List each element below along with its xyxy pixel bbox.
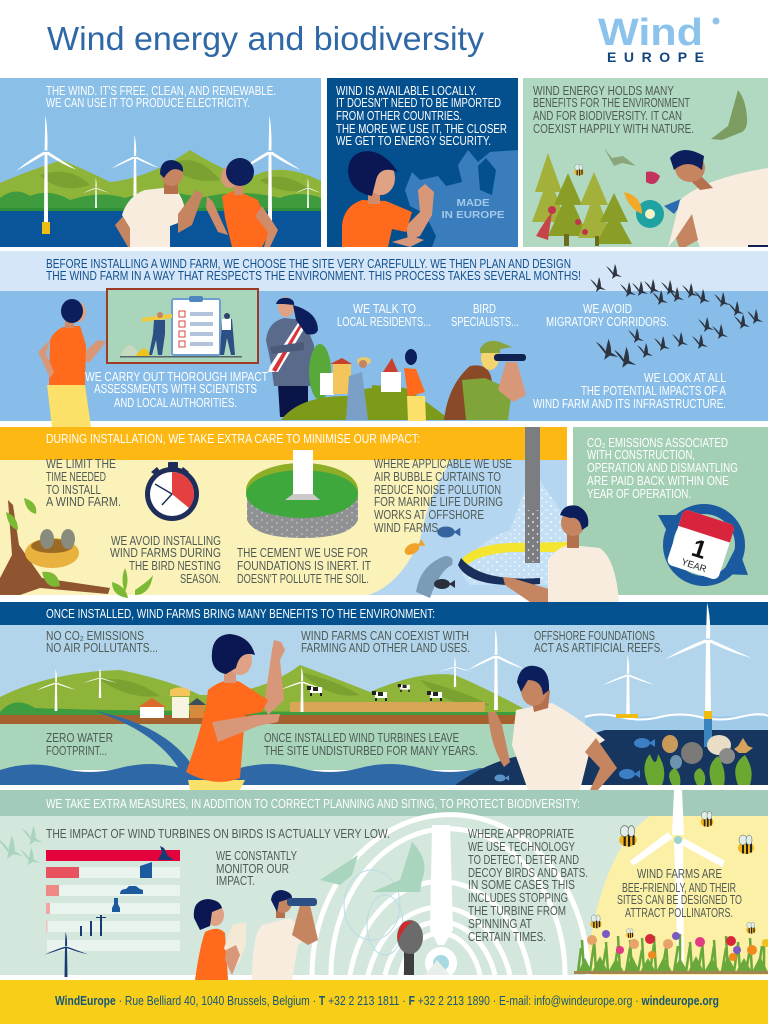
text: nesting: WIND FARMS DURING <box>110 545 221 560</box>
reef: shells and seaweed <box>494 735 753 785</box>
text: cement: DOESN'T POLLUTE THE SOIL. <box>237 571 369 586</box>
text: local energy: WE GET TO ENERGY SECURITY. <box>336 133 491 148</box>
text: nesting <box>110 533 221 586</box>
flock of migratory birds <box>590 264 763 368</box>
text: detect and deter: WHERE APPROPRIATE <box>468 826 574 841</box>
text: zero water: ZERO WATER <box>46 730 113 745</box>
heading: during installation: DURING INSTALLATION, WE TAKE EXTRA CARE TO MINIMISE OUR IMPACT: <box>46 431 420 446</box>
lower ground and water <box>0 711 768 790</box>
text: monitor: MONITOR OUR <box>216 861 289 876</box>
text: monitor: WE CONSTANTLY <box>216 848 297 863</box>
sea background <box>368 460 567 595</box>
cows <box>307 684 442 701</box>
panel: available locally <box>327 78 518 247</box>
person: man leaning <box>668 150 768 251</box>
text: air bubble curtains: WHERE APPLICABLE WE USE <box>374 456 512 471</box>
text: undisturbed: ONCE INSTALLED WIND TURBINES LEAVE <box>264 730 459 745</box>
text: air bubble curtains <box>374 456 512 535</box>
sky <box>0 625 768 725</box>
heading: extra measures: WE TAKE EXTRA MEASURES, IN ADDITION TO CORRECT PLANNING AND SITING, TO PROTECT BIODIVERSITY: <box>46 796 580 811</box>
text: monitor: IMPACT. <box>216 873 255 888</box>
icon: bat and eagle <box>320 842 424 892</box>
radar device <box>397 920 423 975</box>
person: woman waving <box>186 634 285 790</box>
text: time: WE LIMIT THE <box>46 456 116 471</box>
cement foundation <box>246 450 358 538</box>
text: undisturbed <box>264 730 478 758</box>
text: CO2 emissions <box>587 435 738 501</box>
text: potential impacts: WE LOOK AT ALL <box>644 370 726 385</box>
wind turbines <box>36 602 752 747</box>
hills and land <box>0 665 530 724</box>
text: CO2 emissions: ARE PAID BACK WITHIN ONE <box>587 473 729 488</box>
text: air bubble curtains: AIR BUBBLE CURTAINS TO <box>374 469 501 484</box>
text: residents, specialists, corridors: LOCAL RESIDENTS... <box>337 314 431 329</box>
heading: before installing: THE WIND FARM IN A WAY THAT RESPECTS THE ENVIRONMENT. THIS PROCESS TAKES SEVERAL MONTHS! <box>46 268 581 283</box>
map of Europe <box>405 150 518 247</box>
logo: WindEurope: Wind <box>598 12 703 54</box>
icon: pale birds <box>0 826 42 865</box>
text: impact assessments: AND LOCAL AUTHORITIES. <box>114 395 237 410</box>
map of Europe: MADE <box>456 197 490 209</box>
text: impact on birds: THE IMPACT OF WIND TURBINES ON BIRDS IS ACTUALLY VERY LOW. <box>46 826 390 841</box>
framed assessment board <box>107 289 258 363</box>
text: detect and deter: THE TURBINE FROM <box>468 903 566 918</box>
panel: before installing <box>0 251 768 427</box>
text: detect and deter: TO DETECT, DETER AND <box>468 852 579 867</box>
cream background <box>0 460 567 595</box>
text: benefits <box>533 86 694 133</box>
logo: WindEurope: EUROPE <box>607 49 704 65</box>
text: potential impacts <box>533 370 726 411</box>
footer contact text: WindEurope · Rue Belliard 40, 1040 Brussels, Belgium · T +32 2 213 1811 · F +32 2 213 1890 · E-mail: info@windeurope.org · windeurope.org <box>55 994 719 1008</box>
bubble curtain and pile <box>458 427 567 585</box>
text: artificial reefs <box>534 628 663 655</box>
heading band <box>0 602 768 625</box>
text: nesting: SEASON. <box>180 571 221 586</box>
text: bee-friendly <box>617 866 742 920</box>
flower meadow <box>574 930 768 974</box>
text: monitor <box>216 848 297 888</box>
text: cement <box>237 545 371 586</box>
icon: bottle <box>112 898 120 912</box>
planning background <box>0 291 768 421</box>
text: detect and deter: WE USE TECHNOLOGY <box>468 839 575 854</box>
icon: one year calendar: YEAR <box>680 557 708 575</box>
title: Wind energy and biodiversity <box>47 20 485 57</box>
bar chart: causes of bird deaths <box>44 846 180 977</box>
text: coexist with farming <box>301 628 470 655</box>
heading: before installing: BEFORE INSTALLING A WIND FARM, WE CHOOSE THE SITE VERY CAREFULLY. WE THEN PLAN AND DESIGN <box>46 256 571 271</box>
text: nesting: THE BIRD NESTING <box>129 558 221 573</box>
heading: before installing <box>46 256 581 283</box>
text: local energy: IT DOESN'T NEED TO BE IMPORTED <box>336 95 501 110</box>
yellow pollinator area <box>585 808 768 975</box>
text: residents, specialists, corridors: MIGRATORY CORRIDORS. <box>546 314 669 329</box>
text: local energy: WIND IS AVAILABLE LOCALLY. <box>336 83 477 98</box>
text: no emissions <box>46 628 158 655</box>
wind turbines <box>15 115 321 234</box>
text: bee-friendly: WIND FARMS ARE <box>637 866 722 881</box>
intro band <box>0 251 768 292</box>
text: time: TIME NEEDED <box>46 469 106 484</box>
text: the wind: WE CAN USE IT TO PRODUCE ELECTRICITY. <box>46 95 250 110</box>
icon: one year calendar <box>658 509 748 581</box>
text: zero water: FOOTPRINT... <box>46 743 107 758</box>
pale background <box>0 816 768 975</box>
village with residents <box>281 344 450 421</box>
nest and birds on branch <box>0 498 153 598</box>
text: artificial reefs: ACT AS ARTIFICIAL REEFS. <box>534 640 663 655</box>
text: CO2 emissions: WITH CONSTRUCTION, <box>587 447 695 462</box>
offshore water and seabed <box>455 714 768 785</box>
houses <box>138 688 206 718</box>
text: air bubble curtains: WORKS AT OFFSHORE <box>374 507 484 522</box>
person: woman with notebook <box>194 899 246 980</box>
flowers and berries <box>536 164 688 240</box>
text: time: TO INSTALL <box>46 482 101 497</box>
text: detect and deter: SPINNING AT <box>468 916 532 931</box>
text: air bubble curtains: REDUCE NOISE POLLUTION <box>374 482 501 497</box>
person: woman pointing <box>342 151 434 247</box>
icon: stopwatch <box>145 462 199 521</box>
panel: the wind <box>0 78 321 247</box>
text: detect and deter <box>468 826 588 944</box>
text: impact assessments: ASSESSMENTS WITH SCIENTISTS <box>94 381 257 396</box>
icon: one year calendar: 1 <box>688 534 710 565</box>
text: benefits: AND FOR BIODIVERSITY. IT CAN <box>533 108 682 123</box>
text: CO2 emissions: YEAR OF OPERATION. <box>587 486 691 501</box>
person: man with turbine <box>488 666 617 790</box>
heading band <box>0 790 768 816</box>
person: woman <box>206 158 278 247</box>
icon: wind turbine <box>44 932 88 977</box>
text: benefits: WIND ENERGY HOLDS MANY <box>533 83 674 98</box>
person: man watching <box>503 505 619 602</box>
icon: power poles <box>80 915 106 936</box>
footer band <box>0 980 768 1024</box>
heading band <box>0 427 567 460</box>
radar arcs <box>312 815 588 975</box>
text: residents, specialists, corridors: BIRD <box>473 301 496 316</box>
text: local energy: THE MORE WE USE IT, THE CLOSER <box>336 121 507 136</box>
text: the wind <box>46 86 276 107</box>
text: local energy: FROM OTHER COUNTRIES. <box>336 108 462 123</box>
text: time <box>46 456 121 509</box>
text: detect and deter: INCLUDES STOPPING <box>468 890 568 905</box>
text: the wind: THE WIND. IT'S FREE, CLEAN, AND RENEWABLE. <box>46 83 276 98</box>
person: man with binoculars <box>252 890 318 980</box>
turbine on yellow <box>630 790 725 970</box>
marine life <box>403 526 460 598</box>
text: nesting: WE AVOID INSTALLING <box>111 533 221 548</box>
panel: once installed <box>0 602 768 790</box>
icon: cat <box>158 846 174 860</box>
text: cement: THE CEMENT WE USE FOR <box>237 545 368 560</box>
large turbine <box>425 825 457 979</box>
text: time: A WIND FARM. <box>46 494 121 509</box>
text: local energy <box>336 83 507 148</box>
text: no emissions: NO AIR POLLUTANTS... <box>46 640 158 655</box>
text: impact assessments: WE CARRY OUT THOROUGH IMPACT <box>85 369 268 384</box>
icon: eagle <box>711 90 747 140</box>
heading: once installed: ONCE INSTALLED, WIND FARMS BRING MANY BENEFITS TO THE ENVIRONMENT: <box>46 606 435 621</box>
text: air bubble curtains: WIND FARMS. <box>374 520 441 535</box>
text: detect and deter: IN SOME CASES THIS <box>468 877 575 892</box>
person: mayor with sash <box>266 297 318 417</box>
text: residents, specialists, corridors: SPECIALISTS... <box>451 314 519 329</box>
pine trees <box>532 153 632 246</box>
logo: WindEurope <box>598 12 720 65</box>
person: man <box>115 160 203 247</box>
icon: car <box>120 886 143 894</box>
text: detect and deter: DECOY BIRDS AND BATS. <box>468 865 588 880</box>
person: woman presenting <box>38 299 106 427</box>
icon: building <box>140 862 152 878</box>
text: residents, specialists, corridors: WE AVOID <box>583 301 632 316</box>
person: bird specialist with binoculars <box>444 341 526 420</box>
map of Europe: IN EUROPE <box>442 209 504 221</box>
panel: extra measures <box>0 790 768 980</box>
text: air bubble curtains: FOR MARINE LIFE DURING <box>374 494 503 509</box>
text: undisturbed: THE SITE UNDISTURBED FOR MANY YEARS. <box>264 743 478 758</box>
text: zero water <box>46 730 113 758</box>
text: coexist with farming: WIND FARMS CAN COEXIST WITH <box>301 628 469 643</box>
icon: bat <box>604 148 636 166</box>
landscape hills <box>0 150 321 247</box>
text: no emissions: NO CO₂ EMISSIONS <box>46 628 144 643</box>
text: CO2 emissions: CO₂ EMISSIONS ASSOCIATED <box>587 435 728 450</box>
panel: during installation <box>0 427 567 598</box>
text: cement: FOUNDATIONS IS INERT. IT <box>237 558 371 573</box>
panel: CO2 payback <box>573 427 768 595</box>
text: impact assessments <box>85 369 268 410</box>
text: benefits: BENEFITS FOR THE ENVIRONMENT <box>533 95 690 110</box>
text: coexist with farming: FARMING AND OTHER LAND USES. <box>301 640 470 655</box>
panel: benefits for nature <box>523 78 768 251</box>
text: artificial reefs: OFFSHORE FOUNDATIONS <box>534 628 655 643</box>
text: benefits: COEXIST HAPPILY WITH NATURE. <box>533 121 694 136</box>
text: detect and deter: CERTAIN TIMES. <box>468 929 546 944</box>
bees <box>590 812 756 938</box>
text: residents, specialists, corridors <box>337 301 669 329</box>
text: residents, specialists, corridors: WE TALK TO <box>353 301 416 316</box>
